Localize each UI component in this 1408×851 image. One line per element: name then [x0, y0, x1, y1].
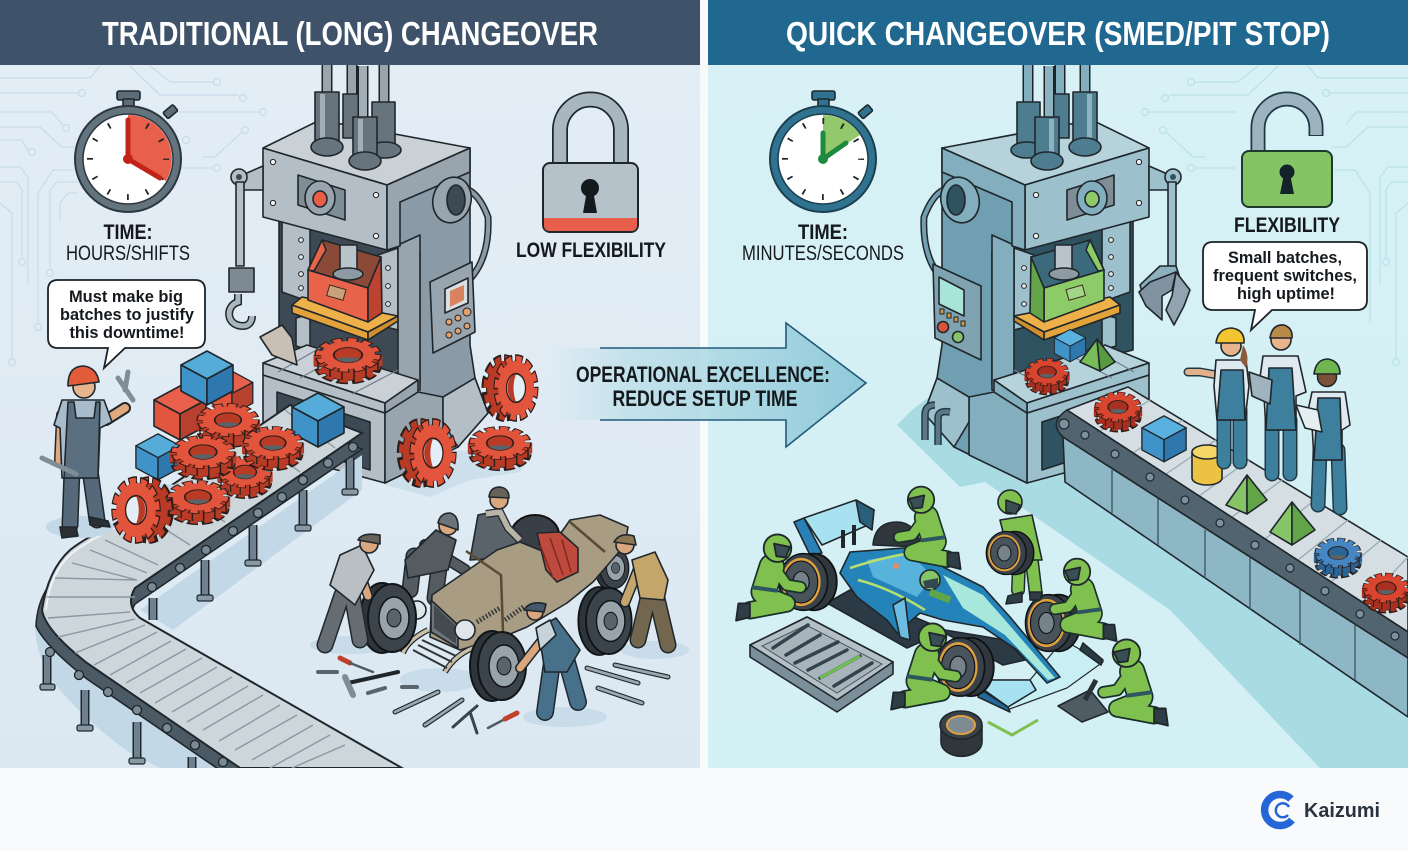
crew: front right [1055, 559, 1117, 641]
car rear wheel far [873, 522, 922, 547]
conveyor belt surface [42, 405, 402, 768]
die: red [292, 240, 398, 340]
conveyor side rail [36, 421, 402, 784]
floor shadow under press and conveyor [897, 385, 1408, 768]
mechanic rear [470, 487, 522, 560]
jack [1058, 680, 1108, 722]
header: traditional [0, 0, 700, 65]
footer logo: Kaizumi: Kaizumi [1304, 800, 1380, 822]
floor shadows [310, 636, 689, 727]
f1 car body [840, 547, 1060, 683]
speech bubble: small batches: high uptime! [1237, 284, 1335, 303]
rear back wheel [511, 515, 559, 555]
scattered tools [318, 658, 668, 733]
header: quick changeover [708, 0, 1408, 65]
parts on right conveyor [1094, 395, 1408, 610]
time label: minutes/seconds: TIME: [798, 221, 848, 244]
rear wing [794, 500, 874, 555]
mechanic far left [325, 534, 380, 645]
f1 pit stop [736, 487, 1168, 756]
engineer: clipboard [1249, 325, 1306, 474]
engineer: green hard hat [1296, 359, 1350, 508]
mechanic gray left [405, 513, 465, 598]
speech bubble: big batches [48, 280, 205, 368]
time label: hours/shifts [66, 221, 190, 265]
part pile: cubes and gears [115, 351, 344, 537]
hydraulic press: gray [229, 66, 488, 483]
crew: front jack [1104, 639, 1168, 726]
control panel [933, 264, 981, 360]
time label: hours/shifts: HOURS/SHIFTS [66, 242, 190, 265]
circuit traces: left [0, 66, 266, 366]
pale floor marking around front wing [980, 640, 1103, 710]
central arrow: reduce setup time [552, 323, 866, 447]
crew: front left [891, 623, 956, 710]
speech bubble: small batches: frequent switches, [1213, 266, 1357, 285]
time label: minutes/seconds [742, 221, 904, 265]
mechanic in blue overalls [520, 603, 580, 712]
speech bubble: small batches: Small batches, [1228, 248, 1342, 267]
control panel [430, 262, 475, 353]
header: quick changeover: QUICK CHANGEOVER (SMED/PIT STOP) [786, 15, 1330, 52]
arrow text: REDUCE SETUP TIME [612, 386, 798, 411]
conveyor slats [47, 410, 345, 768]
vintage car pit crew [310, 487, 689, 733]
stopwatch: minutes [770, 91, 876, 212]
engineer: yellow hard hat [1188, 328, 1249, 462]
panel: traditional long changeover [0, 65, 700, 784]
engineers trio [1188, 325, 1350, 508]
check mark [988, 720, 1038, 735]
conveyor rollers [46, 442, 358, 766]
speech bubble: big batches: Must make big [69, 287, 183, 306]
header: traditional: TRADITIONAL (LONG) CHANGEOVER [102, 15, 598, 52]
panel background: right [708, 65, 1408, 768]
panel background: left [0, 65, 700, 768]
arrow text [576, 362, 830, 411]
crew: tire carrier [986, 490, 1042, 604]
gripper [1139, 266, 1190, 325]
crew: rear top [899, 487, 961, 569]
padlock: open, flexibility [1242, 99, 1332, 207]
die: green [1014, 240, 1120, 340]
front wing [978, 643, 1103, 712]
loose gears beside press [402, 361, 534, 481]
conveyor floor shadows [35, 455, 362, 768]
time label: hours/shifts: TIME: [104, 221, 152, 244]
mechanic far right [614, 535, 668, 645]
panel: quick changeover [708, 65, 1408, 768]
footer band [0, 768, 1408, 851]
crane hook [229, 268, 254, 326]
flexibility label: FLEXIBILITY [1234, 214, 1340, 237]
conveyor legs [40, 458, 358, 768]
foot pipes [925, 405, 950, 445]
worker with wrenches [42, 366, 133, 538]
crew: rear left [736, 534, 800, 621]
hydraulic press: teal [924, 66, 1190, 483]
speech bubble: big batches: batches to justify [60, 305, 195, 324]
floor shadow under press [385, 450, 530, 497]
vintage car body [360, 515, 632, 701]
f1 car floor [827, 590, 1025, 665]
parts on press table [1024, 329, 1115, 392]
conveyor: straight belt [1056, 387, 1408, 717]
tool tray [750, 617, 893, 712]
circuit traces: right [1142, 66, 1408, 366]
time label: minutes/seconds: MINUTES/SECONDS [742, 242, 904, 265]
cockpit driver [920, 570, 950, 600]
gloved debris near hook [260, 325, 297, 365]
arrow text: OPERATIONAL EXCELLENCE: [576, 362, 830, 387]
stopwatch: hours [75, 91, 181, 212]
speech bubble: small batches [1203, 242, 1367, 330]
gear on press table [314, 341, 382, 381]
spare tire [940, 711, 982, 756]
padlock: closed, low flexibility [543, 99, 638, 232]
conveyor: left curved belt [35, 405, 402, 784]
footer logo: Kaizumi [1265, 795, 1380, 826]
low flexibility label: LOW FLEXIBILITY [516, 239, 666, 262]
speech bubble: big batches: this downtime! [70, 323, 184, 342]
